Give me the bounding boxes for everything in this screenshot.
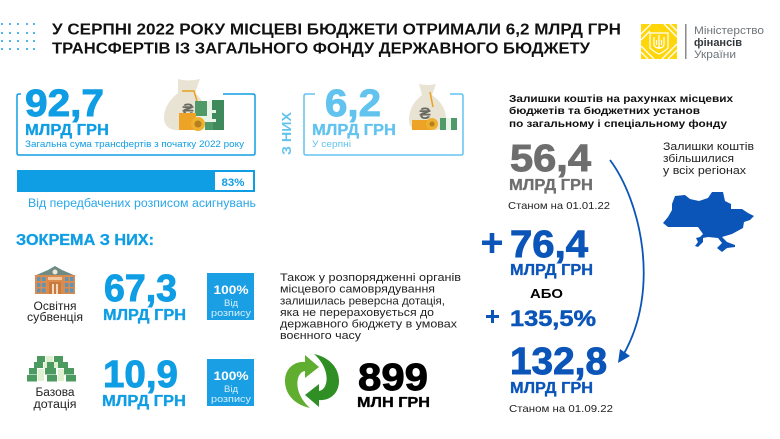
text block: reverse subsidy: місцевого самоврядування bbox=[280, 284, 435, 296]
logo: Ministry of Finance of Ukraine: фінансів bbox=[694, 37, 742, 49]
value: increase amount: 76,4 bbox=[510, 224, 588, 266]
logo: Ministry of Finance of Ukraine: Міністерство bbox=[694, 25, 764, 37]
value: reverse subsidy: 899 bbox=[358, 357, 428, 399]
text block: reverse subsidy bbox=[280, 272, 461, 342]
badge: 100% of plan: 100% bbox=[214, 371, 248, 383]
total value: 92,7 bbox=[25, 83, 104, 125]
panel: total transfers: Загальна сума трансфертів з початку 2022 року bbox=[25, 139, 244, 150]
panel: August transfers bbox=[304, 83, 463, 155]
value: base subsidy: 10,9 bbox=[103, 354, 178, 396]
value: education subvention: 67,3 bbox=[104, 268, 177, 310]
icon: money bag with coins and bills: ₴ bbox=[182, 100, 194, 119]
text block: reverse subsidy: воєнного часу bbox=[280, 330, 362, 342]
logo: Ministry of Finance of Ukraine: України bbox=[694, 49, 736, 61]
value: balance 01.09.22 bbox=[509, 341, 613, 415]
badge: 100% of plan bbox=[207, 273, 254, 320]
badge: 100% of plan: 100% bbox=[214, 285, 248, 297]
heading: account balances: по загальному і спеціальному фонду bbox=[509, 118, 727, 130]
panel: August transfers: У серпні bbox=[312, 139, 351, 150]
value: balance 01.09.22: Станом на 01.09.22 bbox=[509, 403, 613, 415]
title: ТРАНСФЕРТІВ ІЗ ЗАГАЛЬНОГО ФОНДУ ДЕРЖАВНОГО БЮДЖЕТУ bbox=[52, 40, 590, 58]
value: increase percent: 135,5% bbox=[510, 306, 596, 331]
value: increase amount bbox=[482, 224, 593, 279]
label: education subvention: субвенція bbox=[27, 312, 83, 324]
progress bar caption: Від передбачених розписом асигнувань bbox=[28, 198, 256, 210]
value: education subvention bbox=[103, 268, 186, 324]
icon: small money bag bbox=[409, 84, 457, 130]
icon: map of Ukraine bbox=[663, 192, 754, 252]
value: balance 01.01.22: 56,4 bbox=[510, 138, 591, 180]
text: balances rose in all regions bbox=[663, 141, 754, 177]
panel: total transfers bbox=[17, 83, 255, 155]
text: balances rose in all regions: збільшилися bbox=[663, 153, 734, 165]
heading: account balances bbox=[509, 93, 733, 130]
badge: 100% of plan: розпису bbox=[211, 308, 251, 319]
label: base subsidy bbox=[34, 387, 76, 411]
August value: 6,2 bbox=[325, 83, 381, 125]
value: base subsidy: МЛРД ГРН bbox=[102, 393, 186, 410]
text block: reverse subsidy: яка не перераховується до bbox=[280, 307, 434, 319]
icon: school building bbox=[34, 266, 76, 294]
title: У СЕРПНІ 2022 РОКУ МІСЦЕВІ БЮДЖЕТИ ОТРИМАЛИ 6,2 МЛРД ГРН bbox=[52, 22, 621, 38]
text block: reverse subsidy: залишилась реверсна дотація, bbox=[280, 296, 445, 308]
rotated label: of which: З НИХ bbox=[279, 112, 294, 155]
value: balance 01.09.22: МЛРД ГРН bbox=[510, 380, 593, 397]
label: education subvention bbox=[27, 301, 83, 324]
text: balances rose in all regions: у всіх регіонах bbox=[663, 165, 747, 177]
label: education subvention: Освітня bbox=[34, 301, 76, 313]
value: education subvention: МЛРД ГРН bbox=[103, 307, 186, 324]
label: base subsidy: Базова bbox=[36, 387, 75, 399]
icon: green recycling arrows bbox=[285, 354, 339, 408]
logo: Ministry of Finance of Ukraine bbox=[641, 24, 764, 61]
badge: 100% of plan bbox=[207, 359, 254, 406]
badge: 100% of plan: Від bbox=[224, 384, 238, 395]
panel: August transfers: МЛРД ГРН bbox=[312, 122, 396, 139]
value: reverse subsidy: МЛН ГРН bbox=[357, 395, 430, 411]
progress bar: 83%: 83% bbox=[222, 177, 245, 189]
text: balances rose in all regions: Залишки коштів bbox=[663, 141, 754, 153]
icon: small money bag: ₴ bbox=[419, 104, 431, 123]
text block: reverse subsidy: Також у розпорядженні органів bbox=[280, 272, 461, 284]
icon: stacks of banknotes bbox=[27, 356, 76, 382]
label: base subsidy: дотація bbox=[34, 399, 76, 411]
value: increase percent bbox=[486, 306, 596, 331]
text: or: АБО bbox=[530, 287, 563, 301]
progress bar: 83% bbox=[17, 170, 255, 192]
heading: account balances: Залишки коштів на рахунках місцевих bbox=[509, 93, 733, 105]
value: increase amount: МЛРД ГРН bbox=[510, 262, 593, 279]
value: balance 01.09.22: 132,8 bbox=[510, 341, 607, 383]
heading: account balances: бюджетів та бюджетних установ bbox=[509, 105, 701, 117]
panel: total transfers: МЛРД ГРН bbox=[25, 122, 109, 139]
text block: reverse subsidy: державного бюджету в умовах bbox=[280, 318, 458, 330]
icon: money bag with coins and bills bbox=[164, 79, 224, 131]
arrow: balance growth bbox=[610, 160, 644, 363]
badge: 100% of plan: Від bbox=[224, 298, 238, 309]
badge: 100% of plan: розпису bbox=[211, 394, 251, 405]
heading: of which in particular: ЗОКРЕМА З НИХ: bbox=[16, 232, 154, 249]
value: balance 01.01.22: Станом на 01.01.22 bbox=[508, 200, 610, 212]
value: balance 01.01.22: МЛРД ГРН bbox=[509, 177, 593, 194]
value: balance 01.01.22 bbox=[508, 138, 610, 212]
value: base subsidy bbox=[102, 354, 186, 410]
value: reverse subsidy bbox=[357, 357, 430, 411]
decorative dot grid bbox=[1, 23, 35, 50]
title bbox=[52, 22, 621, 58]
